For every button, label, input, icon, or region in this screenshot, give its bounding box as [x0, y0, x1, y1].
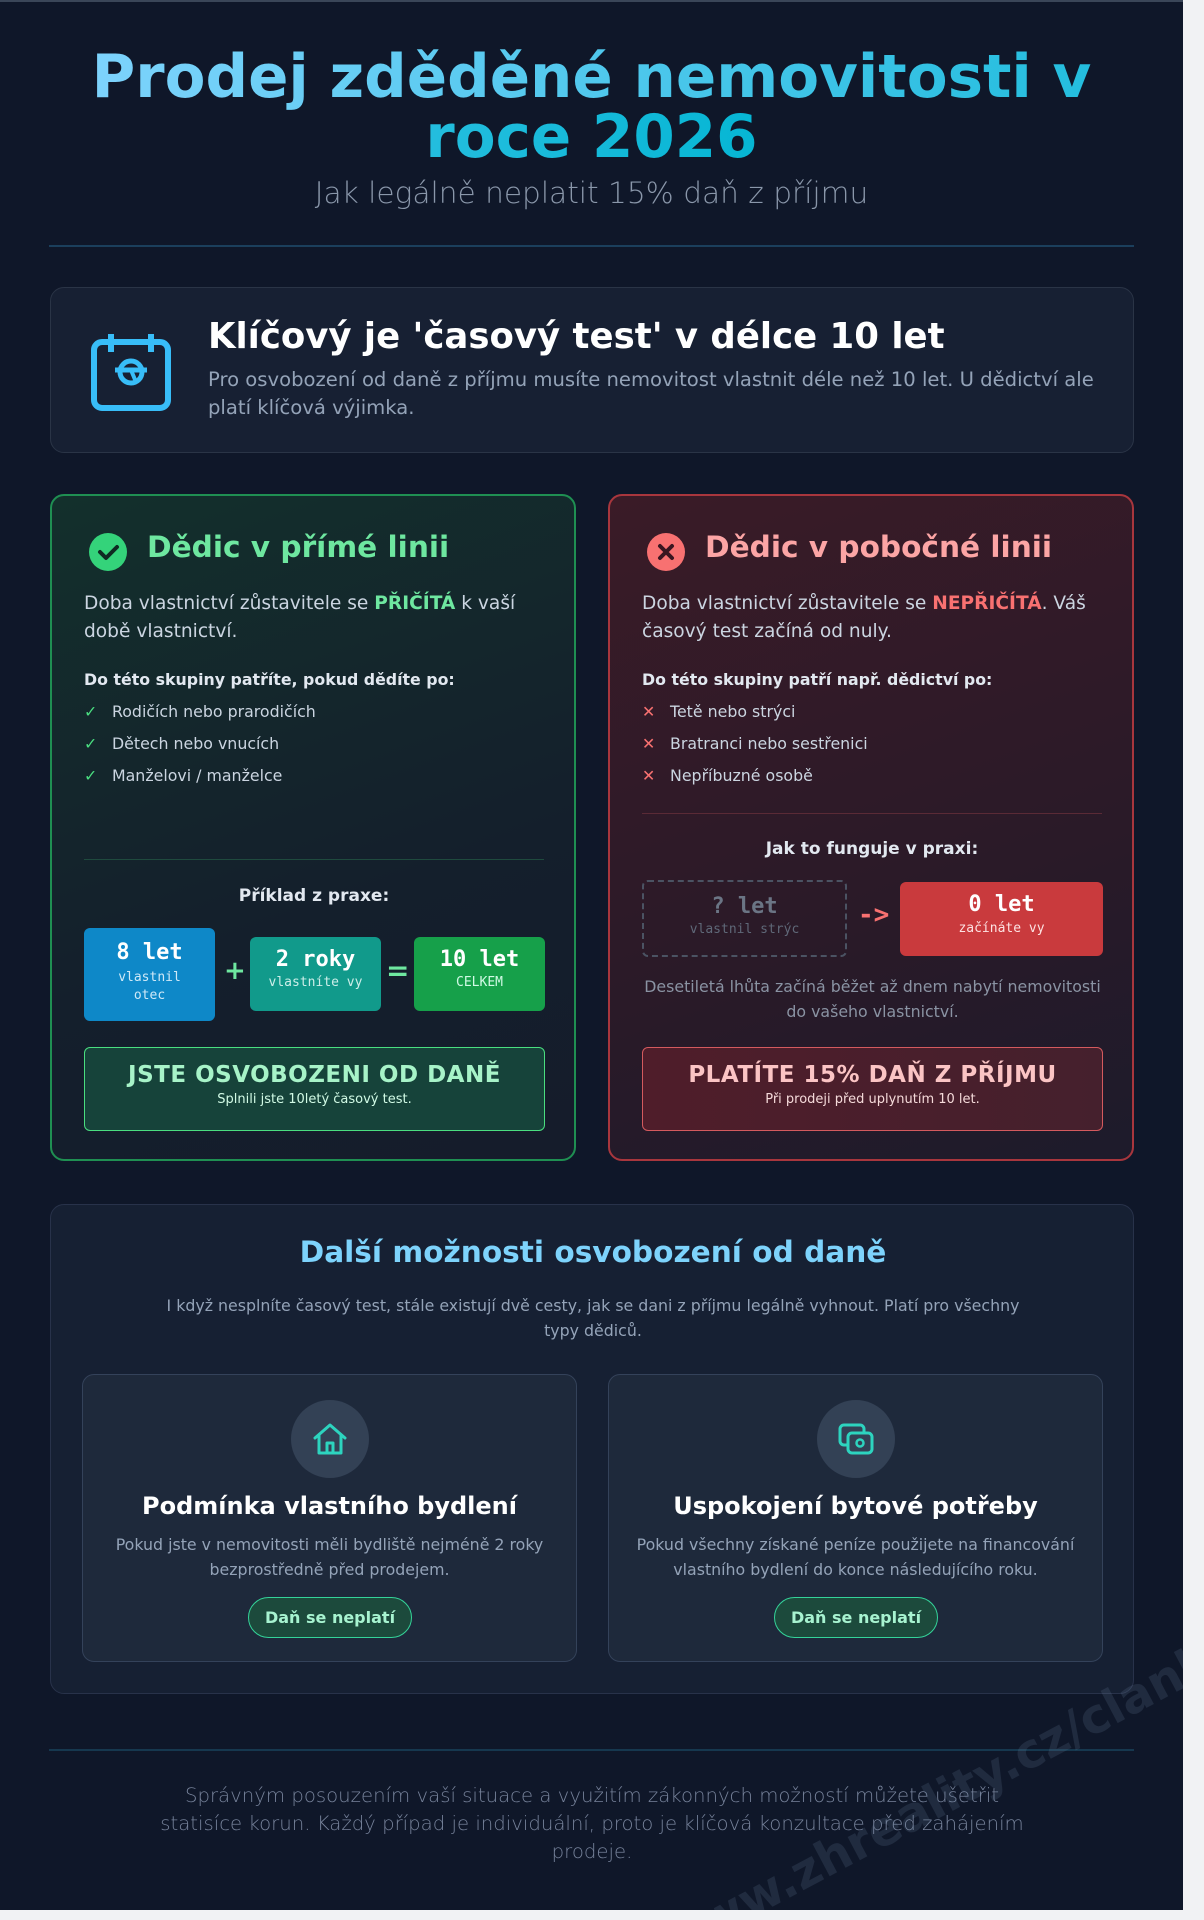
list item: Dětech nebo vnucích	[112, 734, 279, 753]
box: 8 years: 8 let	[116, 940, 183, 965]
list item: ✓	[84, 734, 97, 753]
box: total: 10 let	[440, 947, 519, 972]
text: Doba vlastnictví zůstavitele se PŘIČÍTÁ k vaší době vlastnictví.	[84, 593, 515, 642]
icon: cross	[647, 533, 685, 571]
group label: Do této skupiny patří např. dědictví po:	[642, 670, 992, 689]
box: zero years: 0 let	[968, 892, 1035, 917]
icon: money	[817, 1400, 895, 1478]
example equation	[84, 928, 545, 1021]
box: 8 years: otec	[134, 988, 165, 1003]
list item: ✓	[84, 766, 97, 785]
card: housing need: Pokud všechny získané peníze použijete na financování vlastního bydlení do konce následujícího roku.	[637, 1535, 1074, 1579]
badge	[774, 1597, 938, 1638]
box: total: CELKEM	[456, 975, 503, 990]
title: roce 2026	[425, 103, 758, 172]
result: exempt	[84, 1047, 545, 1131]
panel: direct heir	[50, 494, 576, 1161]
box: zero years	[900, 882, 1103, 956]
badge	[248, 1597, 412, 1638]
result: exempt: Splnili jste 10letý časový test.	[217, 1092, 412, 1107]
card: own housing	[82, 1374, 577, 1662]
practice diagram	[642, 880, 1103, 957]
result: pay tax: Při prodeji před uplynutím 10 let.	[765, 1092, 980, 1107]
box: 8 years	[84, 928, 215, 1021]
heading: Dědic v pobočné linii	[705, 530, 1052, 564]
box: unknown years: ? let	[711, 894, 778, 919]
heading: Dědic v přímé linii	[147, 530, 449, 564]
list item: Tetě nebo strýci	[670, 702, 795, 721]
card: own housing: Podmínka vlastního bydlení	[142, 1492, 517, 1520]
badge: Daň se neplatí	[791, 1608, 921, 1627]
panel: other options	[50, 1204, 1134, 1694]
box: unknown years: vlastnil strýc	[690, 922, 799, 937]
list item: ✕	[642, 734, 655, 753]
list item: Rodičích nebo prarodičích	[112, 702, 316, 721]
note: Desetiletá lhůta začíná běžet až dnem nabytí nemovitosti do vašeho vlastnictví.	[644, 977, 1101, 1021]
description: I když nesplníte časový test, stále existují dvě cesty, jak se dani z příjmu legálně vyhnout. Platí pro všechny typy dědiců.	[167, 1296, 1019, 1340]
list item: Manželovi / manželce	[112, 766, 282, 785]
example equation: =	[386, 954, 409, 987]
example heading: Příklad z praxe:	[239, 886, 389, 906]
example equation: +	[224, 956, 246, 986]
practice heading: Jak to funguje v praxi:	[766, 839, 978, 859]
subtitle: Jak legálně neplatit 15% daň z příjmu	[315, 176, 868, 210]
list item: ✓	[84, 702, 97, 721]
title	[92, 43, 1091, 172]
arrow: ->	[858, 900, 889, 930]
box: 2 years: vlastníte vy	[269, 975, 362, 990]
panel: key time test	[50, 287, 1134, 453]
list item: ✕	[642, 766, 655, 785]
box: total	[414, 937, 545, 1011]
box: 2 years	[250, 937, 381, 1011]
text: Doba vlastnictví zůstavitele se NEPŘIČÍTÁ. Váš časový test začíná od nuly.	[642, 593, 1086, 642]
result: pay tax	[642, 1047, 1103, 1131]
card: own housing: Pokud jste v nemovitosti měli bydliště nejméně 2 roky bezprostředně před prodejem.	[116, 1535, 543, 1579]
result: exempt: JSTE OSVOBOZENI OD DANĚ	[128, 1062, 501, 1088]
list item: Nepříbuzné osobě	[670, 766, 813, 785]
box: 8 years: vlastnil	[118, 970, 181, 985]
badge: Daň se neplatí	[265, 1608, 395, 1627]
box: zero years: začínáte vy	[958, 921, 1045, 936]
group label: Do této skupiny patříte, pokud dědíte po:	[84, 670, 455, 689]
panel: collateral heir	[608, 494, 1134, 1161]
icon: house	[291, 1400, 369, 1478]
list item: ✕	[642, 702, 655, 721]
result: pay tax: PLATÍTE 15% DAŇ Z PŘÍJMU	[688, 1062, 1057, 1088]
box: unknown years	[642, 880, 847, 957]
heading: Klíčový je 'časový test' v délce 10 let	[208, 316, 945, 357]
icon: calendar	[91, 334, 171, 411]
card: housing need: Uspokojení bytové potřeby	[673, 1492, 1038, 1520]
footer text: Správným posouzením vaší situace a využitím zákonných možností můžete ušetřit statisíce korun. Každý případ je individuální, proto je klíčová konzultace před zahájením prodeje.	[160, 1784, 1024, 1863]
box: 2 years: 2 roky	[276, 947, 355, 972]
heading: Další možnosti osvobození od daně	[300, 1235, 886, 1269]
title: Prodej zděděné nemovitosti v	[92, 43, 1091, 112]
card: housing need	[608, 1374, 1103, 1662]
icon: check	[89, 533, 127, 571]
list item: Bratranci nebo sestřenici	[670, 734, 868, 753]
text: Pro osvobození od daně z příjmu musíte nemovitost vlastnit déle než 10 let. U dědictví ale platí klíčová výjimka.	[208, 368, 1094, 419]
